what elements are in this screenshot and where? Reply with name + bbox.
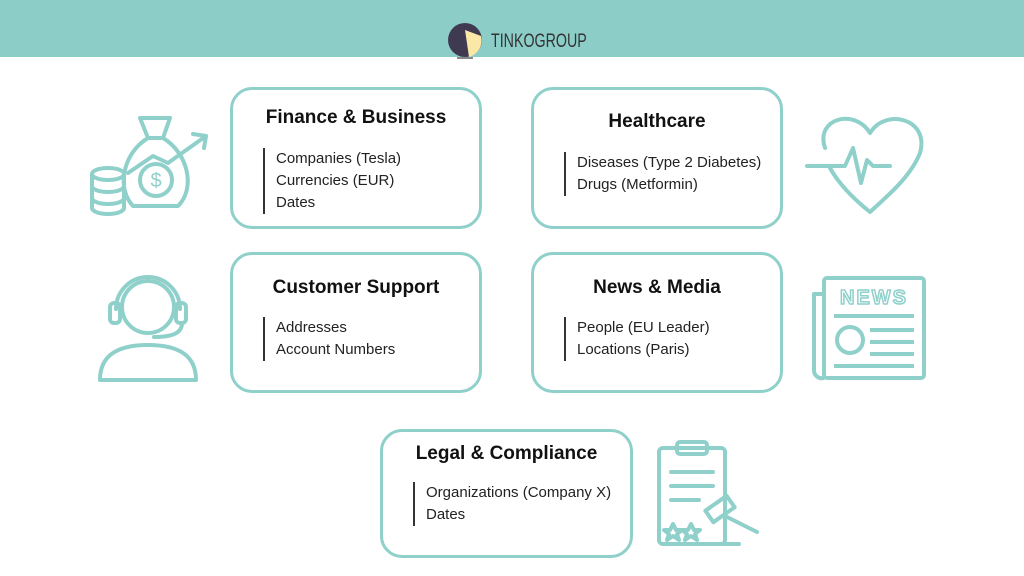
- icon: money bag: [90, 116, 208, 216]
- icon: customer support agent: [98, 275, 198, 382]
- panel: healthcare: Drugs (Metformin): [577, 176, 698, 193]
- panel: healthcare: Healthcare: [608, 111, 706, 132]
- panel: news & media: Locations (Paris): [577, 341, 690, 358]
- icon: heart with pulse: [805, 116, 924, 214]
- panel: healthcare: [531, 87, 783, 229]
- panel: customer support: Addresses: [276, 319, 347, 336]
- panel: finance & business: Currencies (EUR): [276, 172, 394, 189]
- panel: healthcare: Diseases (Type 2 Diabetes): [577, 154, 761, 171]
- panel: finance & business: [230, 87, 482, 229]
- panel: legal & compliance: Legal & Compliance: [416, 443, 597, 464]
- panel: news & media: [531, 252, 783, 393]
- header band: [0, 0, 1024, 57]
- panel: legal & compliance: Dates: [426, 506, 465, 523]
- logo: [448, 23, 587, 59]
- panel: news & media: News & Media: [593, 277, 721, 298]
- panel: news & media: People (EU Leader): [577, 319, 710, 336]
- icon: newspaper: NEWS: [840, 287, 908, 309]
- panel: customer support: Customer Support: [273, 277, 439, 298]
- panel: customer support: [230, 252, 482, 393]
- icon: newspaper: [812, 276, 926, 380]
- icon: money bag: $: [150, 170, 162, 192]
- panel: customer support: Account Numbers: [276, 341, 395, 358]
- panel: legal & compliance: Organizations (Company X): [426, 484, 611, 501]
- panel: finance & business: Dates: [276, 194, 315, 211]
- panel: finance & business: Finance & Business: [266, 107, 446, 128]
- icon: clipboard with gavel: [657, 440, 759, 546]
- panel: legal & compliance: [380, 429, 633, 558]
- panel: finance & business: Companies (Tesla): [276, 150, 401, 167]
- logo: TINKOGROUP: [491, 31, 587, 52]
